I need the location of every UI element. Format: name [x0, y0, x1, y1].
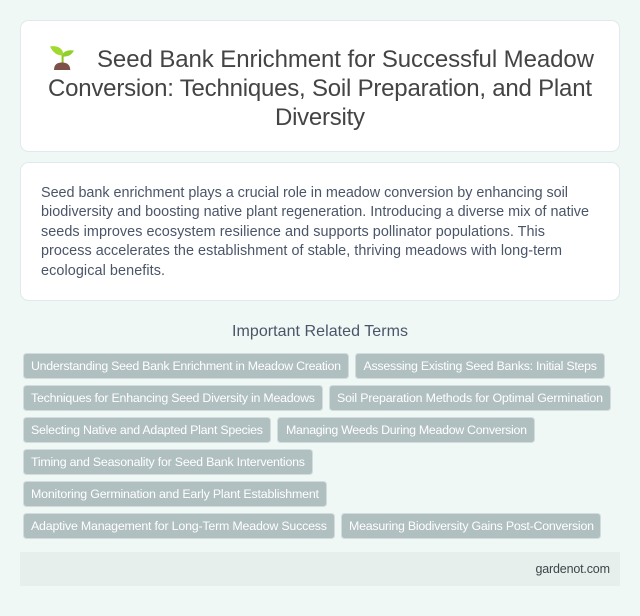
text block: summary paragraph: Seed bank enrichment plays a crucial role in meadow conversion by enhancing soil	[41, 185, 568, 201]
title: Conversion: Techniques, Soil Preparation, and Plant	[48, 75, 592, 102]
title	[48, 46, 595, 131]
text block: summary paragraph: seeds improves ecosystem resilience and supports pollinator populations. This	[41, 224, 545, 240]
text block: summary paragraph: biodiversity and boosting native plant regeneration. Introducing a diverse mix of native	[41, 204, 589, 220]
tag: Assessing Existing Seed Banks: Initial Steps	[364, 359, 597, 373]
tag: Selecting Native and Adapted Plant Species	[31, 423, 263, 437]
tag: Understanding Seed Bank Enrichment in Meadow Creation	[31, 359, 341, 373]
text block: summary paragraph	[41, 185, 589, 279]
tag: Timing and Seasonality for Seed Bank Interventions	[31, 455, 305, 469]
title: Diversity	[275, 104, 365, 131]
panel: summary card	[20, 162, 620, 300]
tag	[356, 354, 604, 378]
tag	[24, 418, 270, 442]
tag: Soil Preparation Methods for Optimal Germination	[337, 391, 603, 405]
text block: summary paragraph: process accelerates the establishment of stable, thriving meadows with long-term	[41, 243, 562, 259]
tag	[330, 386, 610, 410]
tag	[24, 386, 322, 410]
tag: Managing Weeds During Meadow Conversion	[286, 423, 527, 437]
tag	[24, 450, 312, 474]
tag	[24, 514, 334, 538]
tag: Techniques for Enhancing Seed Diversity in Meadows	[31, 391, 315, 405]
tag	[24, 482, 326, 506]
footer source text: gardenot.com	[536, 562, 610, 576]
tag	[278, 418, 534, 442]
tag: Measuring Biodiversity Gains Post-Conversion	[349, 519, 594, 533]
text block: summary paragraph: ecological benefits.	[41, 263, 165, 279]
panel: title card	[20, 20, 620, 152]
tag list: related terms	[24, 354, 610, 538]
tag: Adaptive Management for Long-Term Meadow Success	[31, 519, 327, 533]
tag	[24, 354, 348, 378]
tag	[342, 514, 600, 538]
title: Seed Bank Enrichment for Successful Meadow	[97, 46, 595, 73]
heading: important related terms: Important Related Terms	[232, 323, 408, 340]
tag: Monitoring Germination and Early Plant Establishment	[31, 487, 320, 501]
icon: sprout	[50, 46, 74, 70]
footer	[20, 552, 620, 586]
